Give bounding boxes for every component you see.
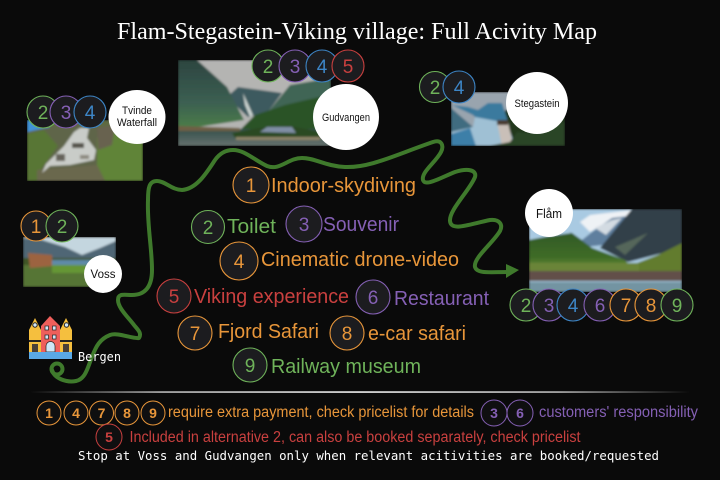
title: Flam-Stegastein-Viking village: Full Acivity Map [117,19,597,45]
activity 6: 6 [368,288,378,309]
photo: Gudvangen [178,60,331,146]
badges: Voss: 2 [57,217,67,238]
note: alternative 2 [96,424,581,450]
activity 6: Restaurant [394,287,489,310]
badges: Gudvangen [252,50,364,82]
photo: Flåm [529,209,682,292]
badges: Tvinde Waterfall: 3 [61,103,71,124]
badges: Voss [21,210,78,242]
note: customers' responsibility [481,400,698,426]
photo: Voss [23,237,116,287]
badges: Tvinde Waterfall: 4 [85,103,96,124]
activity 3: Souvenir [323,213,399,236]
arrowhead [506,264,519,278]
label: Tvinde Waterfall [108,90,166,144]
activity 4: 4 [234,252,245,273]
badges: Flåm: 2 [521,296,531,317]
badges: Gudvangen: 5 [343,57,353,78]
badges: Tvinde Waterfall [27,96,106,128]
activity 1: Indoor-skydiving [271,174,416,197]
badges: Flåm: 4 [568,296,579,317]
photo: Tvinde waterfall [27,120,143,181]
activity 2: Toilet [227,215,276,238]
activity 6 [356,280,489,314]
badges: Flåm: 8 [646,296,656,317]
activity 7 [178,316,319,350]
note: customers' responsibility: 3 [490,405,498,421]
badges: Flåm: 9 [672,296,682,317]
activity 8 [330,316,466,350]
note: extra payment: 7 [98,405,106,421]
label: Stegastein [506,72,568,134]
activity 9: Railway museum [271,355,421,378]
label: Tvinde Waterfall: Waterfall [117,117,157,129]
label: Voss: Voss [91,269,116,281]
label: Tvinde Waterfall: Tvinde [122,105,152,117]
badges: Stegastein: 4 [454,78,465,99]
activity 8: 8 [342,324,352,345]
activity 5: 5 [169,287,179,308]
label: Gudvangen: Gudvangen [322,112,370,124]
label: Voss [84,255,122,293]
note: extra payment [37,401,474,425]
activity 1 [233,167,416,203]
note: alternative 2: 5 [105,429,113,445]
badges: Gudvangen: 3 [290,57,300,78]
activity 9 [233,348,421,382]
activity 7: 7 [190,324,200,345]
photo: Stegastein [451,92,565,146]
activity 4: Cinematic drone-video [261,248,459,271]
badges: Voss: 1 [31,217,41,238]
label: Flåm: Flåm [536,207,562,221]
activity 2: 2 [203,218,213,239]
icon: Bergen houses [29,316,72,359]
note: stops: Stop at Voss and Gudvangen only when relevant acitivities are booked/requested [78,448,659,463]
label: Gudvangen [313,84,379,150]
activity 3 [286,206,399,242]
note: extra payment: 4 [72,405,80,421]
badges: Flåm: 6 [595,296,605,317]
route arrow [52,141,508,381]
note: extra payment: require extra payment, check pricelist for details [168,404,474,421]
activity 8: e-car safari [368,322,466,345]
badges: Flåm: 3 [544,296,554,317]
activity 3: 3 [299,215,309,236]
label: Stegastein: Stegastein [514,98,560,110]
note: extra payment: 8 [123,405,131,421]
note: customers' responsibility: customers' responsibility [539,404,698,421]
badges: Flåm: 7 [621,296,631,317]
badges: Flåm [510,289,693,321]
label: Bergen: Bergen [78,350,121,364]
note: extra payment: 9 [149,405,157,421]
activity 1: 1 [246,176,256,197]
badges: Stegastein: 2 [430,78,440,99]
activity 2 [192,210,276,244]
activity 4 [220,242,459,280]
note: alternative 2: Included in alternative 2, can also be booked separately, check pricelist [130,429,581,446]
legend: activity list [157,167,489,382]
activity 5 [157,279,349,313]
badges: Stegastein [420,71,475,103]
label: Flåm [525,189,573,237]
badges: Tvinde Waterfall: 2 [38,103,48,124]
note: extra payment: 1 [45,405,53,421]
activity 9: 9 [245,356,255,377]
badges: Gudvangen: 2 [263,57,273,78]
activity 5: Viking experience [194,285,349,308]
badges: Gudvangen: 4 [317,57,328,78]
note: customers' responsibility: 6 [516,405,524,421]
activity 7: Fjord Safari [218,320,319,343]
